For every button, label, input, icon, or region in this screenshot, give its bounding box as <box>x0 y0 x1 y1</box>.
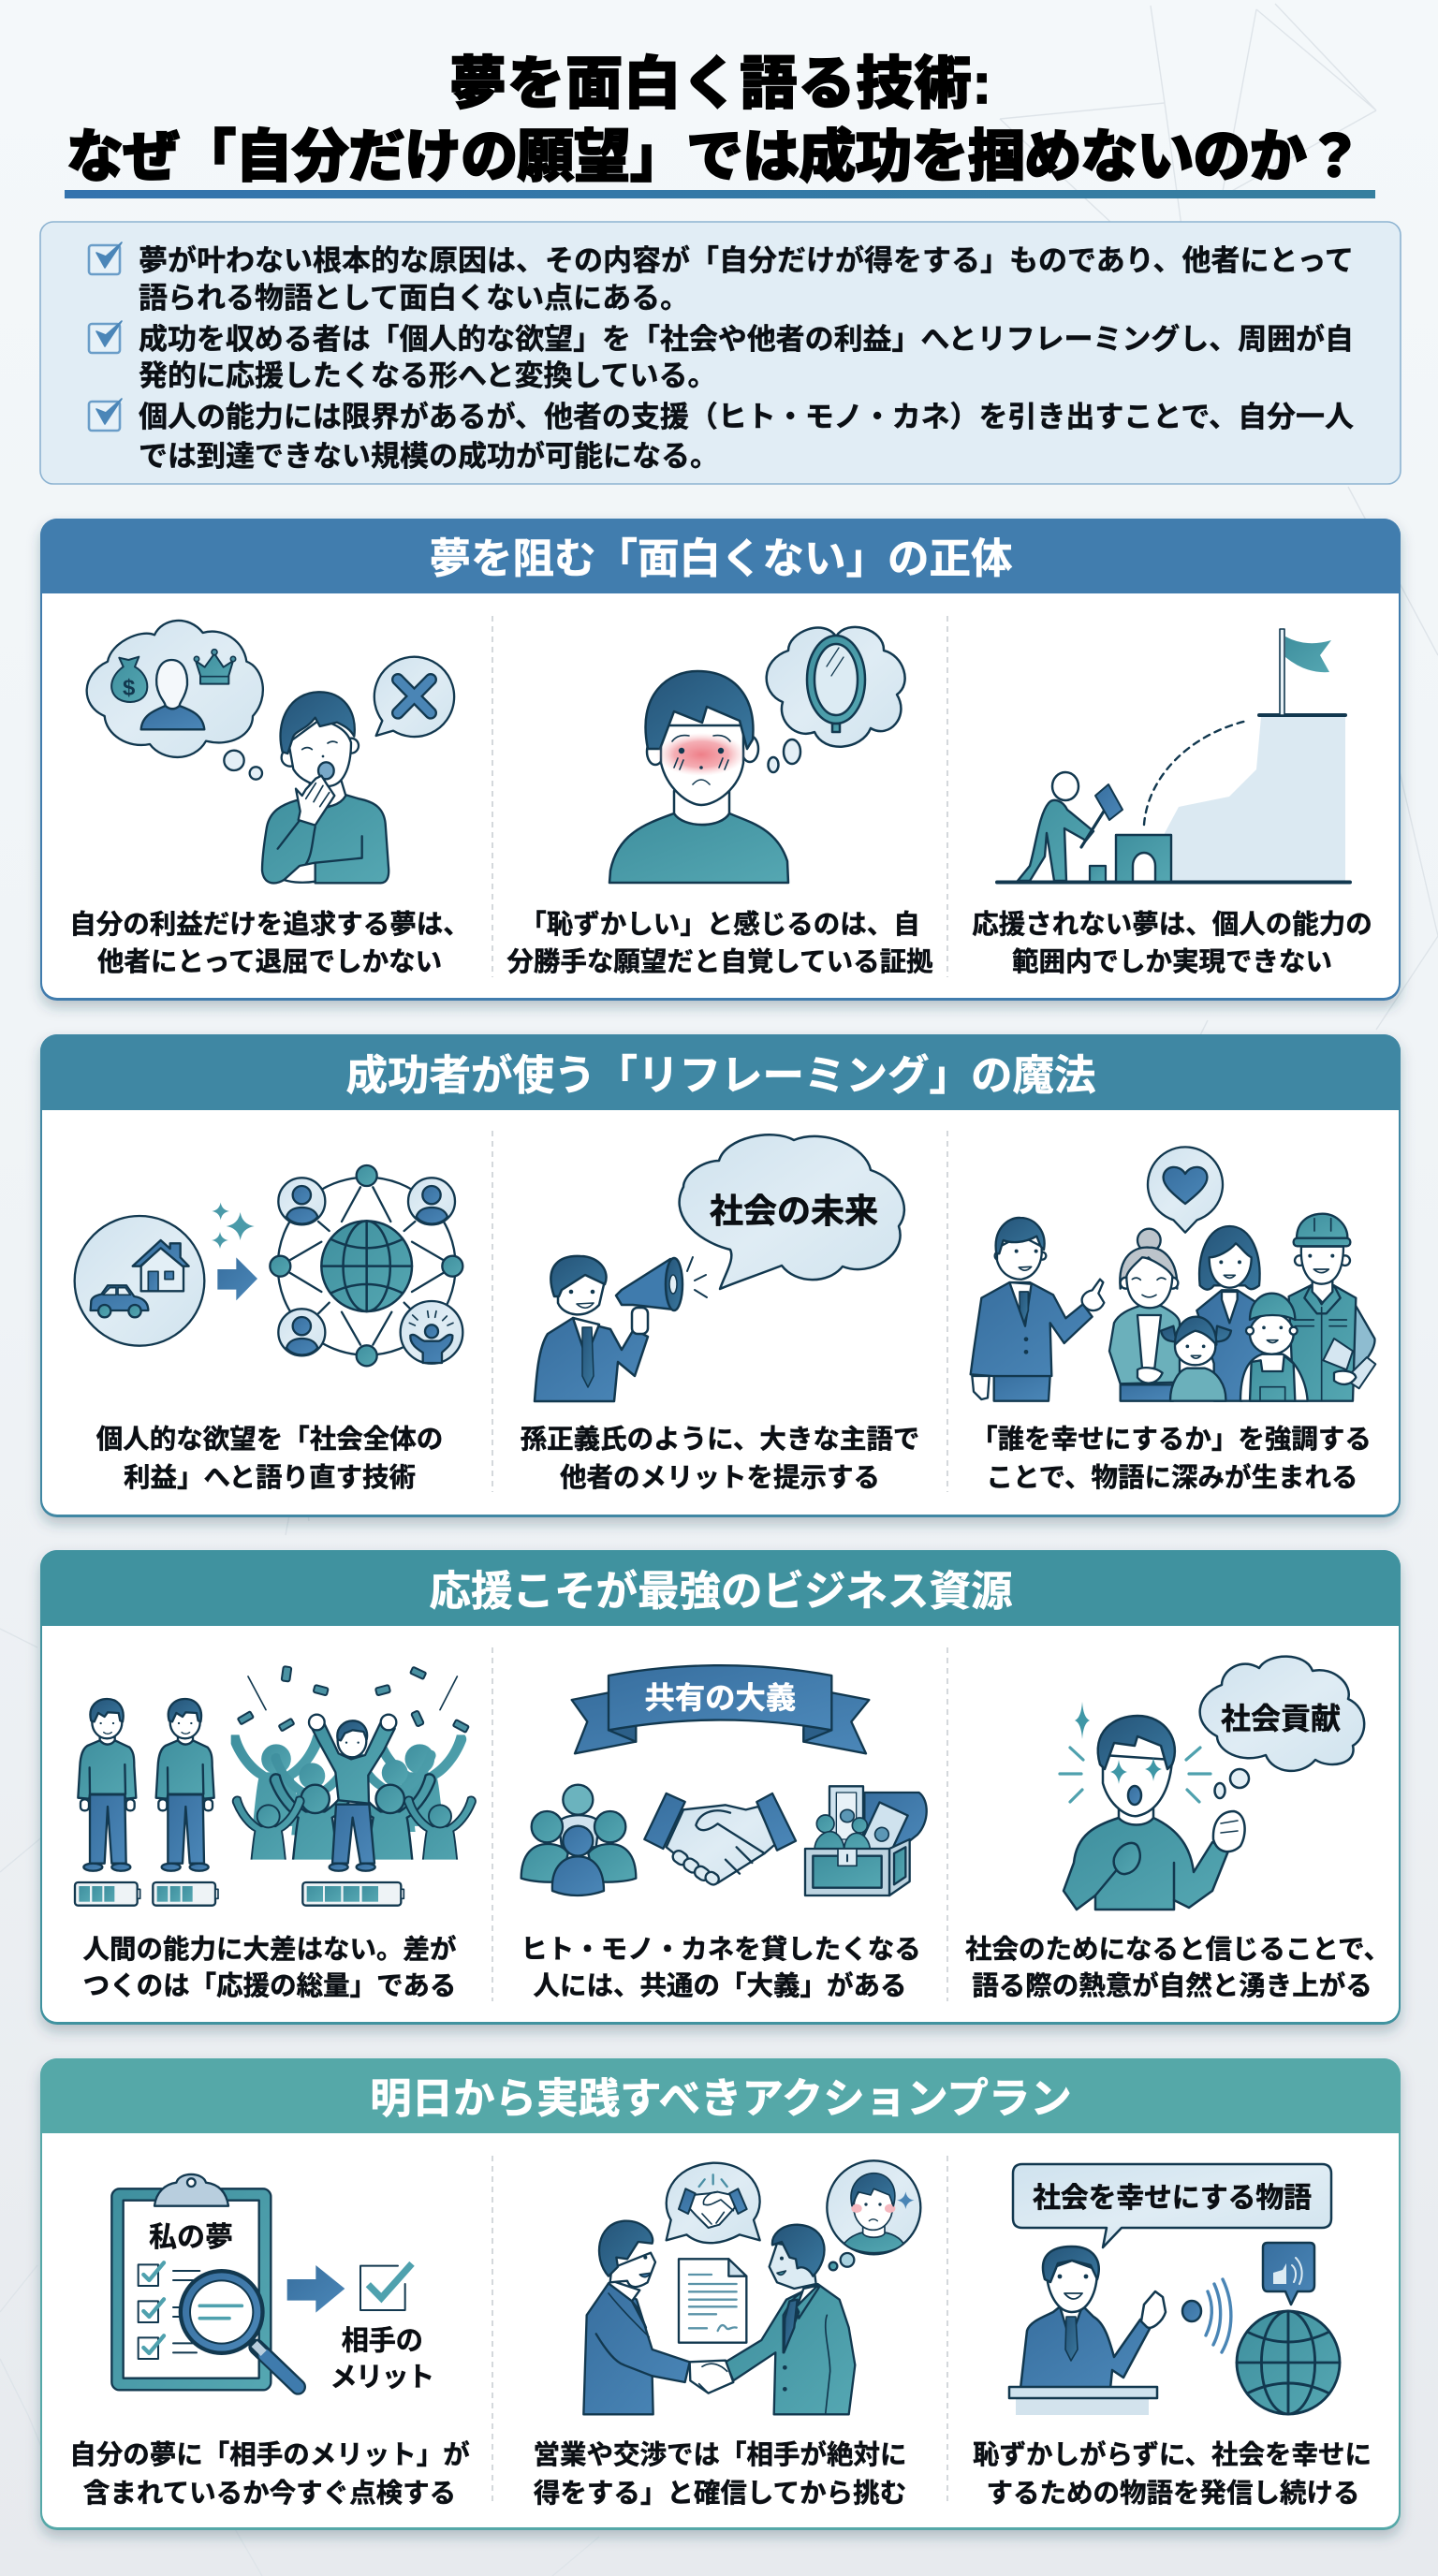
panel heading <box>40 1034 1401 1110</box>
captions: 社会のためになると信じることで、 <box>965 1935 1390 1965</box>
illustration: business negotiation handshake <box>583 2160 920 2414</box>
captions: するための物語を発信し続ける <box>986 2479 1360 2509</box>
captions: 応援されない夢は、個人の能力の <box>972 910 1372 940</box>
captions: 語る際の熱意が自然と湧き上がる <box>972 1970 1372 2001</box>
illustration: clipboard checklist and merit: 相手の <box>342 2326 423 2357</box>
captions: 営業や交渉では「相手が絶対に <box>533 2439 907 2470</box>
captions: 含まれているか今すぐ点検する <box>83 2479 456 2509</box>
illustration: speaker at podium broadcasting to globe <box>1009 2164 1340 2415</box>
panel heading <box>40 1550 1401 1626</box>
illustration: shared cause ribbon, people, handshake, chest <box>521 1665 927 1895</box>
captions: 利益」へと語り直す技術 <box>124 1463 416 1493</box>
captions: 恥ずかしがらずに、社会を幸せに <box>973 2439 1372 2470</box>
captions: ことで、物語に深みが生まれる <box>986 1462 1358 1493</box>
title: 夢を面白く語る技術: <box>449 51 991 115</box>
panel heading: 明日から実践すべきアクションプラン <box>370 2076 1072 2122</box>
captions: 自分の利益だけを追求する夢は、 <box>69 910 470 940</box>
illustration: clipboard checklist and merit <box>111 2174 434 2393</box>
captions: 他者にとって退屈でしかない <box>97 947 442 977</box>
title: なぜ「自分だけの願望」では成功を掴めないのか？ <box>66 124 1363 188</box>
illustration: beneficiaries group with heart <box>971 1147 1375 1401</box>
illustration: speaker at podium broadcasting to globe: 社会を幸せにする物語 <box>1033 2183 1312 2214</box>
panel heading <box>40 2058 1401 2133</box>
captions: つくのは「応援の総量」である <box>83 1971 456 2001</box>
icon: check 3 <box>89 399 122 431</box>
panel heading: 成功者が使う「リフレーミング」の魔法 <box>345 1053 1096 1099</box>
illustration: passionate person with thought bubble <box>1060 1657 1364 1910</box>
captions: ヒト・モノ・カネを貸したくなる <box>521 1935 921 1965</box>
panel heading: 夢を阻む「面白くない」の正体 <box>429 536 1013 582</box>
captions: 他者のメリットを提示する <box>560 1463 880 1493</box>
captions: 個人的な欲望を「社会全体の <box>96 1425 443 1455</box>
title <box>66 51 1363 188</box>
captions: 孫正義氏のように、大きな主語で <box>521 1425 919 1455</box>
illustration: embarrassed person and mirror thought <box>609 627 905 883</box>
illustration: shared cause ribbon, people, handshake, chest: 共有の大義 <box>644 1681 796 1715</box>
captions <box>69 910 1372 977</box>
captions: 「誰を幸せにするか」を強調する <box>971 1425 1372 1455</box>
captions <box>96 1425 1372 1493</box>
panel heading: 応援こそが最強のビジネス資源 <box>429 1569 1013 1615</box>
summary text: では到達できない規模の成功が可能になる。 <box>139 440 719 473</box>
title underline <box>65 190 1375 198</box>
panel: リフレーミング <box>40 1034 1401 1517</box>
illustration: speaker with megaphone: 社会の未来 <box>710 1192 878 1230</box>
illustration: personal desire to society network <box>75 1165 462 1366</box>
panel: summary <box>40 222 1401 484</box>
illustration: speaker with megaphone <box>535 1134 904 1401</box>
illustration: person yawning with selfish thoughts: $ <box>123 675 135 700</box>
summary text: 成功を収める者は「個人的な欲望」を「社会や他者の利益」へとリフレーミングし、周囲が自 <box>139 323 1354 356</box>
summary text: 語られる物語として面白くない点にある。 <box>139 282 689 315</box>
panel: 応援 <box>40 1550 1401 2025</box>
captions: 自分の夢に「相手のメリット」が <box>69 2439 470 2470</box>
illustration: clipboard checklist and merit: メリット <box>330 2362 434 2393</box>
captions: 人間の能力に大差はない。差が <box>82 1934 457 1965</box>
captions: 「恥ずかしい」と感じるのは、自 <box>520 910 920 940</box>
icon: check 1 <box>89 242 122 274</box>
summary text: 個人の能力には限界があるが、他者の支援（ヒト・モノ・カネ）を引き出すことで、自分一人 <box>139 401 1354 433</box>
illustration: equal people, crowd support and batteries <box>75 1666 476 1906</box>
icon: check 2 <box>89 321 122 353</box>
panel heading <box>40 519 1401 593</box>
illustration: passionate person with thought bubble: 社会貢献 <box>1221 1702 1341 1735</box>
captions: 範囲内でしか実現できない <box>1012 947 1332 977</box>
captions <box>82 1934 1390 2001</box>
panel: 夢を阻む <box>40 519 1401 1001</box>
summary text <box>139 244 1354 473</box>
illustration: climbing alone toward flag <box>997 629 1350 882</box>
captions: 得をする」と確信してから挑む <box>534 2479 906 2509</box>
summary text: 夢が叶わない根本的な原因は、その内容が「自分だけが得をする」ものであり、他者にとって <box>139 244 1354 277</box>
illustration: person yawning with selfish thoughts <box>87 621 454 883</box>
summary text: 発的に応援したくなる形へと変換している。 <box>139 359 717 392</box>
illustration: clipboard checklist and merit: 私の夢 <box>149 2222 233 2253</box>
captions: 人には、共通の「大義」がある <box>533 1970 907 2001</box>
captions <box>69 2439 1372 2509</box>
panel: アクションプラン <box>40 2058 1401 2530</box>
captions: 分勝手な願望だと自覚している証拠 <box>506 947 933 977</box>
